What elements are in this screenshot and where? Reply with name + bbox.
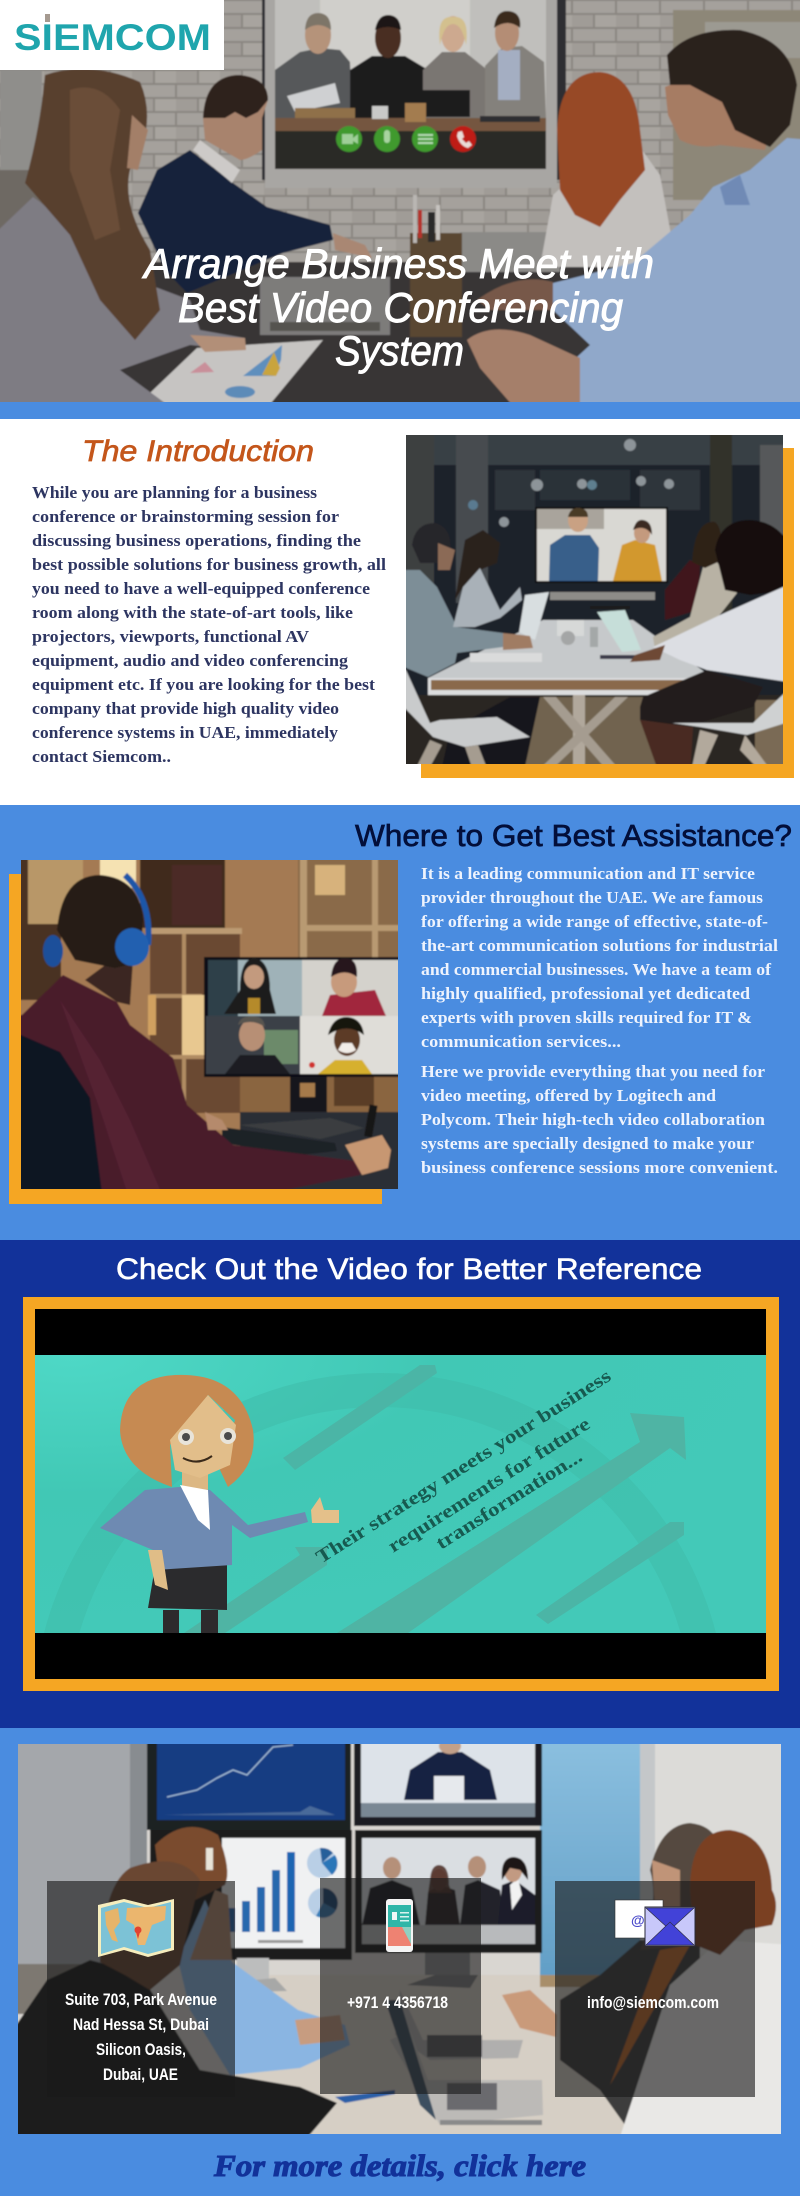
section: video	[0, 1240, 800, 1728]
presenter	[100, 1375, 339, 1633]
slanted video caption: requirements for future	[384, 1414, 594, 1557]
icon: smartphone	[386, 1899, 413, 1952]
icon: world map	[98, 1899, 174, 1957]
address text: Nad Hessa St, Dubai	[73, 2016, 209, 2034]
intro paragraph: you need to have a well-equipped conference	[32, 579, 370, 598]
intro paragraph: While you are planning for a business	[32, 483, 318, 502]
section: where to get best assistance	[0, 805, 800, 1240]
orange offset block	[421, 448, 794, 778]
white table	[428, 620, 713, 678]
assistance paragraphs	[421, 864, 778, 1177]
intro paragraph: contact Siemcom..	[32, 747, 171, 766]
assistance paragraphs: Here we provide everything that you need for	[421, 1062, 765, 1081]
navy sweater man	[138, 150, 333, 293]
address text	[65, 1991, 217, 2084]
laptops and cups	[519, 592, 549, 640]
left woman and man	[178, 1900, 350, 2075]
panel: email	[555, 1881, 755, 2097]
upper monitors	[147, 1732, 351, 1830]
email address: info@siemcom.com	[587, 1994, 719, 2012]
logo: SIEMCOM	[14, 17, 211, 58]
video player frame	[23, 1297, 779, 1691]
right attendees	[665, 560, 700, 620]
slanted video caption	[312, 1366, 615, 1568]
video still: animated presenter	[35, 1355, 766, 1633]
intro paragraph: discussing business operations, finding the	[32, 531, 361, 550]
section: introduction	[32, 435, 794, 778]
intro paragraph: room along with the state-of-art tools, like	[32, 603, 353, 622]
intro photo: boardroom video call	[406, 435, 783, 764]
logo	[0, 0, 224, 70]
heading: the introduction: The Introduction	[82, 435, 314, 468]
hero photo: video conference meeting	[0, 0, 800, 414]
address text: Dubai, UAE	[103, 2066, 178, 2084]
tv screen	[535, 507, 668, 583]
panel: address	[47, 1881, 235, 2097]
chairs	[672, 692, 783, 736]
assistance paragraphs: provider throughout the UAE. We are famous	[421, 888, 764, 907]
intro paragraph: equipment, audio and video conferencing	[32, 651, 349, 670]
monitor with four participants	[204, 957, 410, 1077]
heading: video: Check Out the Video for Better Reference	[116, 1253, 702, 1286]
assistance paragraphs: Polycom. Their high-tech video collaboration	[421, 1110, 765, 1129]
section: contact	[0, 1728, 800, 2196]
icon: email envelope	[615, 1900, 695, 1946]
contact photo: office with monitors	[6, 1732, 793, 2146]
panel: phone	[320, 1878, 481, 2094]
slanted video caption: transformation...	[432, 1446, 586, 1554]
assistance paragraphs: It is a leading communication and IT service	[421, 864, 755, 883]
assistance paragraphs: highly qualified, professional yet dedicated	[421, 984, 750, 1003]
assistance paragraphs: business conference sessions more convenient.	[421, 1158, 778, 1177]
left attendees	[412, 523, 450, 563]
monitor stand and desk	[289, 1076, 328, 1113]
wall screen	[262, 0, 566, 180]
assistance paragraphs: video meeting, offered by Logitech and	[421, 1086, 716, 1105]
assistance paragraphs: for offering a wide range of effective, state-of-	[421, 912, 768, 931]
right woman and man	[560, 1940, 700, 2146]
intro paragraph: conference systems in UAE, immediately	[32, 723, 339, 742]
address text: Suite 703, Park Avenue	[65, 1991, 217, 2009]
slanted video caption: Their strategy meets your business	[312, 1366, 615, 1568]
footer call to action: For more details, click here	[213, 2148, 586, 2183]
assistance paragraphs: communication services...	[421, 1032, 621, 1051]
address text: Silicon Oasis,	[96, 2041, 186, 2059]
table	[120, 261, 613, 402]
assistance paragraphs: the-art communication solutions for industrial	[421, 936, 778, 955]
head and headphones	[85, 960, 133, 1005]
man's back in maroon shirt	[9, 975, 363, 1201]
intro paragraph: best possible solutions for business growth, all	[32, 555, 386, 574]
red hair woman	[540, 147, 677, 267]
right man	[553, 138, 800, 414]
hero title: Best Video Conferencing	[178, 284, 623, 331]
lower monitors	[150, 1830, 352, 1960]
orange offset block	[9, 874, 382, 1204]
phone number: +971 4 4356718	[347, 1994, 448, 2012]
stands	[237, 1958, 269, 1982]
intro paragraph	[32, 483, 386, 766]
left woman	[0, 197, 245, 414]
section: hero	[0, 0, 800, 419]
assistance paragraphs: experts with proven skills required for IT &	[421, 1008, 752, 1027]
hero title: System	[335, 327, 464, 374]
assistance photo: man on video call	[21, 860, 398, 1189]
heading: assistance: Where to Get Best Assistance?	[355, 818, 792, 853]
hero title	[141, 240, 654, 374]
intro paragraph: conference or brainstorming session for	[32, 507, 339, 526]
assistance paragraphs: and commercial businesses. We have a team of	[421, 960, 772, 979]
intro paragraph: equipment etc. If you are looking for the best	[32, 675, 376, 694]
hero title: Arrange Business Meet with	[141, 240, 654, 287]
intro paragraph: projectors, viewports, functional AV	[32, 627, 309, 646]
call control buttons	[336, 126, 362, 152]
laptops	[395, 1990, 523, 2060]
floor and legs under table	[406, 695, 780, 764]
assistance paragraphs: systems are specially designed to make your	[421, 1134, 754, 1153]
icon: email envelope: @	[631, 1912, 645, 1928]
intro paragraph: company that provide high quality video	[32, 699, 339, 718]
